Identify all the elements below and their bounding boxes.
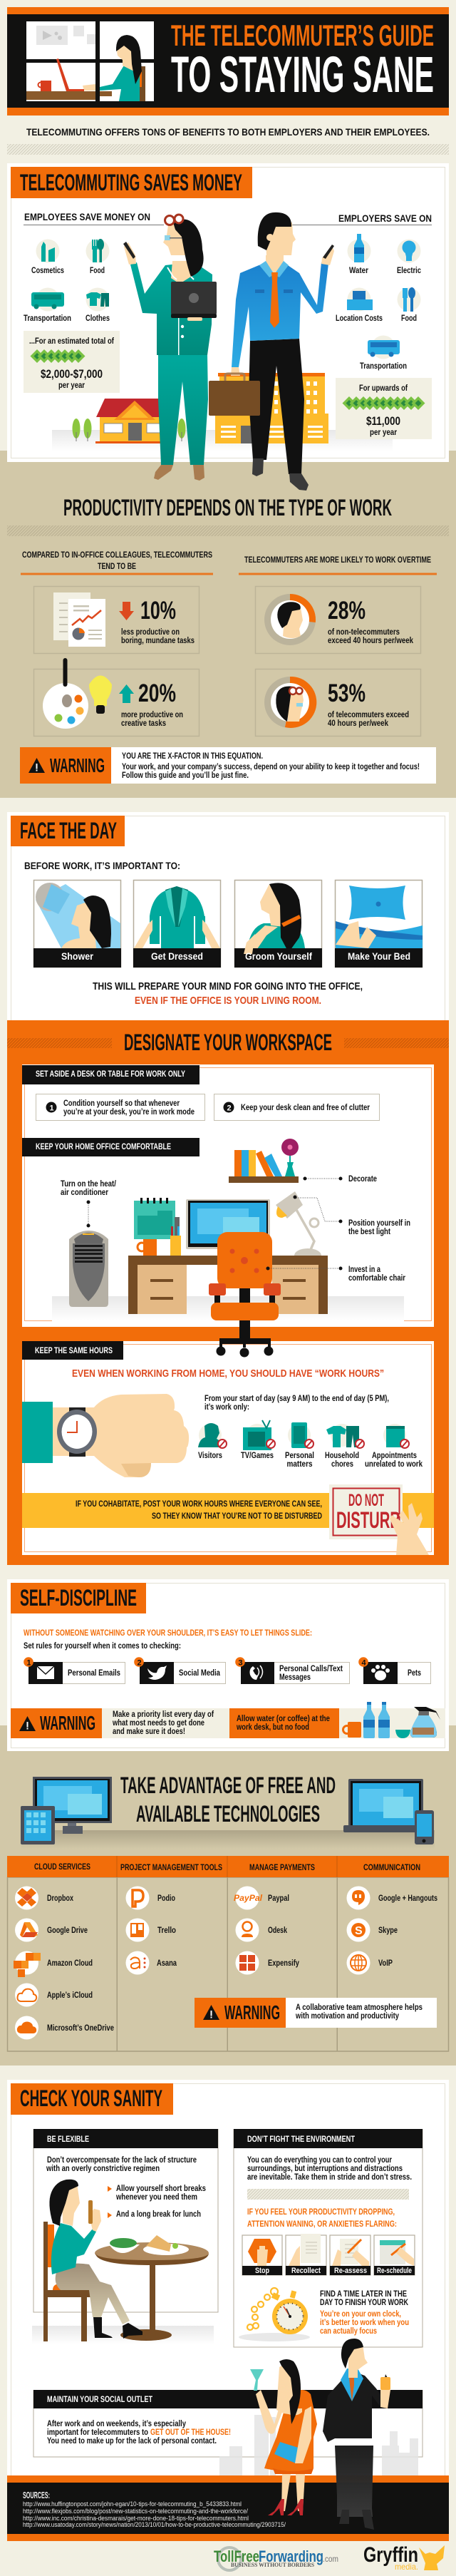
- icon: electric: Electric: [397, 265, 421, 275]
- text: living room: EVEN IF THE OFFICE IS YOUR LIVING ROOM.: [135, 995, 321, 1007]
- tool: odesk: Odesk: [268, 1925, 287, 1935]
- step: re-schedule: Re-schedule: [377, 2267, 412, 2275]
- callout: employee savings: per year: [58, 380, 85, 390]
- callout: employee savings: ...For an estimated total of: [29, 337, 114, 346]
- stat card: 10% less productive: [34, 586, 200, 653]
- box: be flexible: BE FLEXIBLE: [47, 2134, 89, 2144]
- text: work only: it’s work only:: [204, 1402, 249, 1412]
- illustration: desktop and tablet: [21, 1777, 435, 1849]
- box: don't fight the environment: ATTENTION WANING, OR ANXIETIES FLARING:: [247, 2219, 397, 2229]
- stat card: 53%: of telecommuters exceed: [328, 709, 409, 719]
- step: recollect: [286, 2234, 326, 2275]
- callout: warning collaboration: [195, 1998, 437, 2028]
- stat card: 28%: of non-telecommuters: [328, 627, 400, 637]
- icon: location costs: Location Costs: [336, 313, 383, 323]
- box: maintain your social outlet: You need to make up for the lack of personal contact.: [47, 2436, 217, 2446]
- box: maintain your social outlet: GET OUT OF THE HOUSE!: [150, 2427, 231, 2437]
- icon: appointments: unrelated to work: [365, 1459, 423, 1469]
- column: in-office comparison: [21, 550, 213, 736]
- label: position light: Position yourself in: [348, 1218, 410, 1228]
- tip 1: you’re at your desk, you’re in work mode: [63, 1107, 195, 1117]
- icon: tv: [241, 1420, 275, 1460]
- icon: employer food: Food: [401, 313, 417, 323]
- callout: warning priorities: and make sure it does!: [113, 1726, 185, 1736]
- box: don't fight the environment: DON’T FIGHT THE ENVIRONMENT: [247, 2134, 356, 2144]
- heading: telecommuting saves money: [11, 167, 252, 198]
- table header: PROJECT MANAGEMENT TOOLS: [120, 1862, 222, 1872]
- stat card: 20% more productive: 20%: [138, 679, 176, 707]
- tool: paypal: Paypal: [268, 1893, 289, 1903]
- pointer: chair line: [266, 1266, 342, 1271]
- text: find a time later: FIND A TIME LATER IN THE: [320, 2289, 407, 2299]
- column: in-office comparison: TEND TO BE: [98, 561, 136, 571]
- panel: designate your workspace: [7, 1020, 449, 1565]
- callout: warning priorities: work desk, but no food: [236, 1722, 309, 1732]
- heading: technologies: [120, 1772, 336, 1827]
- tab: keep the same hours: [22, 1341, 123, 1360]
- sign: do not disturb: DO NOT: [348, 1491, 384, 1510]
- illustration: city skyline: [219, 2415, 418, 2475]
- tool: skype: S: [355, 1925, 363, 1937]
- box: be flexible: whenever you need them: [115, 2192, 197, 2202]
- text: find a time later: DAY TO FINISH YOUR WORK: [320, 2297, 408, 2307]
- stat card: 53%: 40 hours per/week: [328, 718, 388, 728]
- source links: http://www.usatoday.com/story/news/nation/2013/10/01/how-to-be-productive-telecommuting/2903715/: [23, 2521, 286, 2528]
- tool: google drive: Google Drive: [47, 1925, 88, 1935]
- icon: food: Food: [90, 265, 105, 275]
- tool: icloud: [15, 1984, 93, 2006]
- text: work only: [204, 1393, 389, 1412]
- tool: expensify: Expensify: [268, 1958, 299, 1968]
- callout: warning collaboration: A collaborative team atmosphere helps: [296, 2002, 423, 2012]
- panel: check your sanity: [7, 2080, 449, 2572]
- icon: household chores: chores: [331, 1459, 353, 1469]
- panel: self-discipline: [7, 1579, 449, 1751]
- step: stop: Stop: [255, 2267, 269, 2275]
- text: find a time later: [320, 2289, 409, 2336]
- card: shower: [33, 880, 121, 968]
- stat card: 10% less productive: less productive on: [121, 627, 180, 637]
- callout: employer savings: per year: [370, 427, 397, 437]
- tool: asana: Asana: [157, 1958, 177, 1968]
- box: be flexible: with an overly constrictive regimen: [46, 2163, 160, 2173]
- callout: warning priorities: Make a priority list every day of: [113, 1709, 214, 1719]
- callout: warning priorities: what most needs to get done: [112, 1718, 204, 1728]
- callout: warning x-factor: [20, 747, 436, 784]
- callout: warning x-factor: WARNING: [50, 754, 105, 776]
- icon: food: [86, 239, 110, 275]
- card: make your bed: Make Your Bed: [348, 950, 410, 962]
- stat card: 53%: [255, 669, 420, 736]
- footer: [7, 2475, 449, 2541]
- text: find a time later: You’re on your own clock,: [320, 2309, 401, 2319]
- illustration: pocket watch: [239, 2288, 310, 2341]
- rule 1: personal emails: [24, 1657, 125, 1684]
- panel: face the day: [7, 812, 449, 1027]
- rule 3: personal calls: Personal Calls/Text: [279, 1663, 343, 1673]
- tip 1: [36, 1094, 205, 1121]
- source links: http://www.flexjobs.com/blog/post/new-statistics-on-telecommuting-and-the-workforce/: [23, 2508, 248, 2515]
- tab: keep your home office comfortable: KEEP YOUR HOME OFFICE COMFORTABLE: [36, 1141, 171, 1151]
- illustration: man with briefcase: [209, 212, 334, 491]
- callout: warning collaboration: with motivation and productivity: [295, 2011, 399, 2021]
- callout: warning collaboration: WARNING: [224, 2001, 280, 2023]
- stat card: 10% less productive: 10%: [140, 597, 176, 625]
- box: don't fight the environment: You can do everything you can to control your: [247, 2155, 392, 2165]
- rule 2: social media: Social Media: [179, 1668, 220, 1678]
- icon: clothes: Clothes: [86, 313, 110, 323]
- callout: warning priorities: Allow water (or coffee) at the: [237, 1713, 330, 1723]
- tool: skype: [346, 1918, 398, 1942]
- card: shower: Shower: [61, 950, 93, 962]
- label: position light: the best light: [348, 1226, 390, 1236]
- text: let things slide: WITHOUT SOMEONE WATCHING OVER YOUR SHOULDER, IT’S EASY TO LET THINGS SLIDE:: [24, 1628, 312, 1638]
- table header: CLOUD SERVICES: [34, 1862, 90, 1872]
- stat card: 20% more productive: creative tasks: [121, 718, 166, 728]
- icon: tv: TV/Games: [241, 1450, 274, 1460]
- tool: amazon cloud: [14, 1951, 93, 1977]
- stat card: 20% more productive: [34, 658, 200, 736]
- text: set rules: Set rules for yourself when it comes to checking:: [24, 1641, 181, 1651]
- tool: google hangouts: Google + Hangouts: [378, 1893, 437, 1903]
- illustration: air conditioner: [69, 1231, 108, 1307]
- table header: COMMUNICATION: [363, 1862, 420, 1872]
- icon: employer transportation: Transportation: [360, 361, 407, 371]
- stat card: 10% less productive: boring, mundane tasks: [121, 635, 195, 645]
- stat card: 28%: exceed 40 hours per/week: [328, 635, 413, 645]
- icon: water: Water: [349, 265, 368, 275]
- rule 1: personal emails: 1: [27, 1658, 31, 1667]
- label: decorate: Decorate: [348, 1174, 377, 1184]
- heading: technologies: AVAILABLE TECHNOLOGIES: [136, 1801, 320, 1827]
- tool: expensify: [235, 1951, 299, 1975]
- panel: telecommuting saves money: [7, 163, 449, 462]
- label: chair: [348, 1264, 405, 1283]
- icon: water: [348, 234, 370, 275]
- logo: tollfreeforwarding: .com: [323, 2554, 338, 2564]
- illustration: laptop and phone: [343, 1779, 434, 1844]
- callout: employee savings: $2,000-$7,000: [41, 367, 103, 381]
- rule 4: pets: [358, 1657, 430, 1684]
- tool: skype: Skype: [378, 1925, 398, 1935]
- icon: phone: Personal: [285, 1450, 314, 1460]
- illustration: couple socializing: [250, 2339, 390, 2530]
- icon: phone: [285, 1422, 314, 1469]
- tab: set aside a desk: [22, 1065, 200, 1084]
- stat card: 20% more productive: more productive on: [121, 709, 183, 719]
- heading: telecommuting saves money: TELECOMMUTING SAVES MONEY: [20, 170, 242, 195]
- box: maintain your social outlet: [33, 2390, 423, 2457]
- icon: visitors: [198, 1423, 227, 1460]
- text: prepare your mind: THIS WILL PREPARE YOUR MIND FOR GOING INTO THE OFFICE,: [93, 980, 363, 992]
- box: don't fight the environment: [33, 2129, 423, 2475]
- tip 2: [214, 1094, 379, 1121]
- tool: odesk: [235, 1918, 287, 1942]
- rule 2: social media: 2: [137, 1658, 142, 1667]
- tool: podio: Podio: [157, 1893, 175, 1903]
- logo: gryffin media: Gryffin: [363, 2543, 418, 2567]
- subheading: before work: BEFORE WORK, IT’S IMPORTANT TO:: [24, 860, 180, 871]
- tip 2: 2: [227, 1104, 232, 1112]
- stat card: 53%: 53%: [328, 679, 366, 707]
- icon: household chores: Household: [325, 1450, 359, 1460]
- heading: face the day: [11, 816, 125, 846]
- step: re-assess: Re-assess: [334, 2267, 367, 2275]
- tool: onedrive: Microsoft’s OneDrive: [47, 2023, 114, 2033]
- label: position light: [294, 1195, 410, 1236]
- icon: appointments: [365, 1424, 423, 1469]
- tool: podio: [125, 1887, 175, 1909]
- band: cohabitate note: IF YOU COHABITATE, POST YOUR WORK HOURS WHERE EVERYONE CAN SEE,: [76, 1499, 322, 1509]
- label: chair: comfortable chair: [348, 1273, 405, 1283]
- icon: electric: [397, 240, 421, 275]
- tip 1: 1: [50, 1104, 54, 1112]
- box: don't fight the environment: are inevitable. Take them in stride and don’t stress.: [247, 2172, 412, 2182]
- tan background: technologies section: [0, 1725, 456, 2066]
- illustration: lamp: [276, 1191, 321, 1263]
- step: re-assess: [330, 2235, 370, 2275]
- icon: visitors: Visitors: [198, 1450, 222, 1460]
- header banner: [7, 7, 449, 116]
- icon: transportation: Transportation: [24, 313, 71, 323]
- tool: paypal: PayPal: [234, 1893, 263, 1903]
- tool: paypal: [234, 1887, 289, 1909]
- icon: employer food: [398, 287, 420, 323]
- icon: location costs: [336, 288, 383, 323]
- callout: employee savings: [24, 331, 120, 393]
- tool: voip: VoIP: [378, 1958, 393, 1968]
- stat card: 28%: 28%: [328, 597, 366, 625]
- illustration: drinks: [343, 1702, 440, 1738]
- sub-panel: keep the same hours: [22, 1341, 434, 1555]
- tool: trello: Trello: [157, 1925, 176, 1935]
- box: maintain your social outlet: important for telecommuters to: [47, 2427, 148, 2437]
- callout: warning x-factor: YOU ARE THE X-FACTOR IN THIS EQUATION.: [122, 752, 263, 761]
- logo: tollfreeforwarding: TollFree: [214, 2547, 259, 2565]
- employers column heading: EMPLOYERS SAVE ON: [338, 212, 432, 224]
- tool: google drive: [15, 1918, 88, 1942]
- icon: appointments: Appointments: [372, 1450, 417, 1460]
- column: overtime: [239, 555, 437, 736]
- icon: phone: matters: [286, 1459, 313, 1469]
- band: cohabitate note: SO THEY KNOW THAT YOU’RE NOT TO BE DISTURBED: [152, 1511, 322, 1521]
- heading: self-discipline: [11, 1583, 146, 1613]
- stat card: 28%: [255, 586, 420, 653]
- heading: check your sanity: [11, 2083, 173, 2115]
- tool: icloud: Apple’s iCloud: [47, 1990, 93, 2000]
- card: get dressed: Get Dressed: [151, 950, 203, 962]
- source links: http://www.inc.com/christina-desmarais/get-more-done-18-tips-for-telecommuters.html: [23, 2515, 249, 2522]
- callout: employer savings: [336, 378, 432, 439]
- box: maintain your social outlet: After work and on weekends, it’s especially: [47, 2418, 186, 2428]
- tool: trello: [125, 1918, 176, 1942]
- heading: face the day: FACE THE DAY: [20, 818, 117, 843]
- table header: MANAGE PAYMENTS: [249, 1862, 315, 1872]
- rule 3: personal calls: [235, 1657, 349, 1684]
- header illustration: woman at window: [26, 21, 154, 101]
- tool: voip: [346, 1951, 393, 1975]
- sub-panel: desk and comfort: [22, 1064, 434, 1327]
- box: don't fight the environment: IF YOU FEEL YOUR PRODUCTIVITY DROPPING,: [247, 2207, 395, 2217]
- sign: do not disturb: DISTURB: [336, 1507, 400, 1533]
- text: find a time later: can actually focus: [320, 2326, 377, 2336]
- box: maintain your social outlet: MAINTAIN YOUR SOCIAL OUTLET: [47, 2394, 153, 2404]
- logo: tollfreeforwarding: Forwarding: [259, 2547, 323, 2565]
- rule 2: social media: [134, 1657, 225, 1684]
- table header: [7, 1856, 449, 1877]
- card: groom yourself: [234, 880, 322, 968]
- card: make your bed: [335, 880, 423, 968]
- heading: self-discipline: SELF-DISCIPLINE: [20, 1585, 137, 1611]
- card: get dressed: [133, 880, 221, 968]
- box: be flexible: And a long break for lunch: [116, 2209, 201, 2219]
- label: decorate: [304, 1174, 377, 1184]
- rule 3: personal calls: 3: [238, 1658, 243, 1667]
- illustration: wrist with watch: [22, 1394, 189, 1477]
- text: work hours: EVEN WHEN WORKING FROM HOME, YOU SHOULD HAVE “WORK HOURS”: [72, 1367, 384, 1380]
- box: be flexible: [33, 2129, 218, 2312]
- icon: clothes: [86, 288, 110, 323]
- footer heading: sources: SOURCES:: [23, 2490, 50, 2500]
- illustration: desk: [128, 1256, 328, 1314]
- label: air conditioner: air conditioner: [61, 1187, 108, 1197]
- source links: [23, 2500, 286, 2528]
- rule 4: pets: Pets: [408, 1668, 421, 1678]
- illustration: woman eating lunch: [43, 2180, 209, 2341]
- icon: household chores: [325, 1424, 364, 1469]
- step: stop: [242, 2235, 282, 2275]
- icon: employer transportation: [360, 335, 407, 371]
- icon: cosmetics: [31, 240, 64, 275]
- step: re-schedule: [374, 2235, 415, 2275]
- logo: tollfreeforwarding: [214, 2547, 338, 2570]
- illustration: shelf with books and flower: [229, 1139, 299, 1183]
- box: don't fight the environment: surroundings, but interruptions and distractions: [247, 2163, 403, 2173]
- step: recollect: Recollect: [291, 2267, 321, 2275]
- tool: amazon cloud: Amazon Cloud: [47, 1958, 93, 1968]
- callout: warning x-factor: Follow this guide and you’ll be just fine.: [122, 770, 249, 780]
- tool: google hangouts: [346, 1887, 437, 1909]
- tool: asana: [125, 1951, 177, 1975]
- icon: transportation: [24, 288, 71, 323]
- tab: set aside a desk: SET ASIDE A DESK OR TABLE FOR WORK ONLY: [36, 1069, 185, 1079]
- illustration: house and trees: [73, 399, 185, 443]
- tip 2: Keep your desk clean and free of clutter: [241, 1102, 370, 1112]
- callout: warning priorities: [11, 1708, 445, 1738]
- callout: warning priorities: WARNING: [40, 1712, 95, 1734]
- illustration: woman with laptop: [123, 215, 217, 481]
- band: cohabitate note: [22, 1493, 434, 1528]
- sign: do not disturb: [329, 1484, 429, 1555]
- icon: cosmetics: Cosmetics: [31, 265, 64, 275]
- logo: gryffin media: media.: [395, 2562, 418, 2572]
- tab: keep the same hours: KEEP THE SAME HOURS: [35, 1345, 113, 1355]
- logo: tollfreeforwarding: BUSINESS WITHOUT BORDERS: [231, 2562, 315, 2568]
- illustration: office building: [215, 373, 328, 443]
- rule 4: pets: 4: [362, 1658, 366, 1667]
- rule 3: personal calls: Messages: [279, 1672, 311, 1682]
- source links: http://www.huffingtonpost.com/john-egan/10-tips-for-telecommuting_b_5433833.html: [23, 2500, 242, 2508]
- label: chair: Invest in a: [348, 1264, 380, 1274]
- text: work only: From your start of day (say 9 AM) to the end of day (5 PM),: [204, 1393, 389, 1403]
- tan background: productivity section: [0, 451, 456, 798]
- icon: hand on sign: [390, 1503, 429, 1555]
- rule 1: personal emails: Personal Emails: [68, 1668, 120, 1678]
- tool: dropbox: Dropbox: [47, 1893, 73, 1903]
- table: tools: [7, 1856, 449, 2051]
- box: be flexible: Allow yourself short breaks: [116, 2183, 206, 2193]
- heading: check your sanity: CHECK YOUR SANITY: [20, 2085, 162, 2111]
- tool: onedrive: [15, 2016, 114, 2039]
- tool: dropbox: [15, 1887, 73, 1909]
- card: groom yourself: Groom Yourself: [245, 950, 312, 962]
- label: air conditioner: Turn on the heat/: [61, 1179, 117, 1189]
- illustration: office chair: [209, 1232, 281, 1358]
- callout: employer savings: $11,000: [366, 414, 400, 428]
- column: in-office comparison: COMPARED TO IN-OFFICE COLLEAGUES, TELECOMMUTERS: [22, 550, 212, 560]
- callout: employer savings: For upwards of: [359, 383, 408, 393]
- illustration: monitor and desk items: [138, 1199, 270, 1256]
- tip 1: Condition yourself so that whenever: [63, 1098, 180, 1108]
- employees column heading: EMPLOYEES SAVE MONEY ON: [24, 211, 150, 222]
- tab: keep your home office comfortable: [22, 1138, 200, 1156]
- box: be flexible: Don’t overcompensate for the lack of structure: [47, 2155, 197, 2165]
- text: find a time later: it’s better to work when you: [320, 2317, 409, 2327]
- label: air conditioner: [61, 1179, 117, 1228]
- illustration: calendar: [134, 1198, 175, 1239]
